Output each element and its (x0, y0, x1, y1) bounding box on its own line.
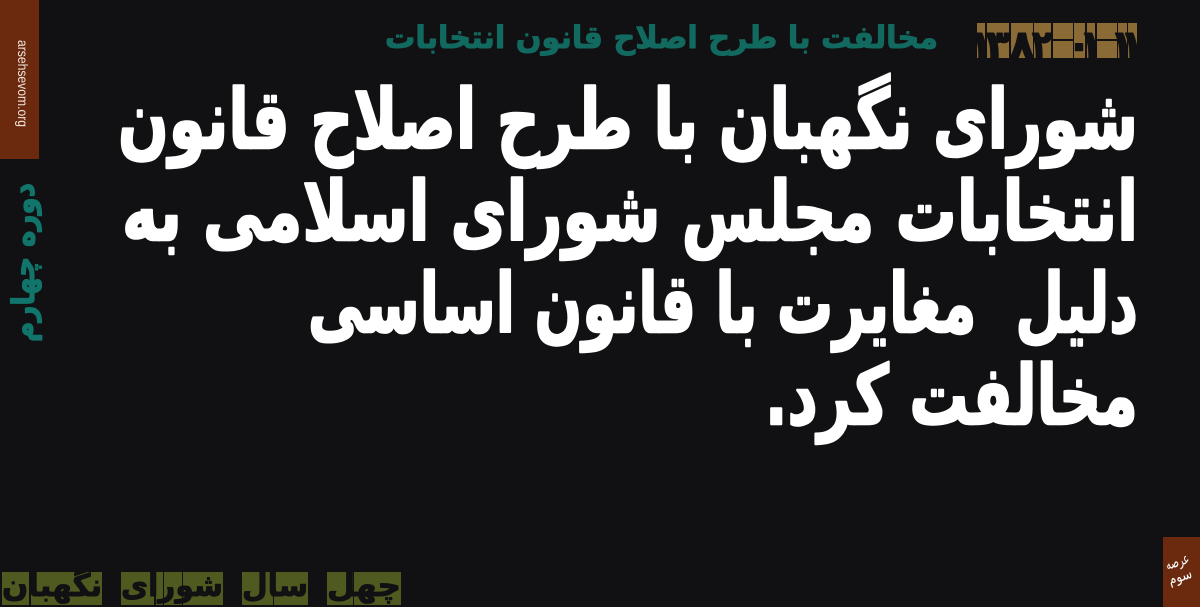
date digits: ۱ (1079, 23, 1103, 68)
date tiles (969, 23, 1144, 68)
series title words: سال (242, 568, 308, 604)
logo calligraphy (1161, 549, 1196, 589)
date digits: ۱ (1110, 23, 1134, 68)
panel: website side tab (0, 0, 39, 159)
date digits: ۳ (986, 23, 1010, 68)
website address: arsehsevom.org (15, 40, 30, 127)
date digits (969, 23, 1144, 68)
series title words: شورای (121, 568, 223, 604)
series title words: نگهبان (2, 567, 102, 604)
subtitle: مخالفت با طرح اصلاح قانون انتخابات (385, 20, 938, 56)
logo calligraphy: سوم (1166, 564, 1194, 589)
date digits: ۱ (969, 23, 993, 68)
date digits: ۲ (1032, 23, 1052, 68)
series title words (2, 567, 401, 604)
date digits: ۸ (1010, 23, 1034, 68)
period label: دوره چهارم (6, 183, 42, 342)
series title tiles (2, 567, 401, 605)
date digits: ۱ (1120, 23, 1144, 68)
logo badge (1161, 537, 1200, 607)
series title words: چهل (327, 568, 401, 604)
date digits: ۰ (1067, 23, 1091, 68)
main headline (118, 73, 1138, 444)
